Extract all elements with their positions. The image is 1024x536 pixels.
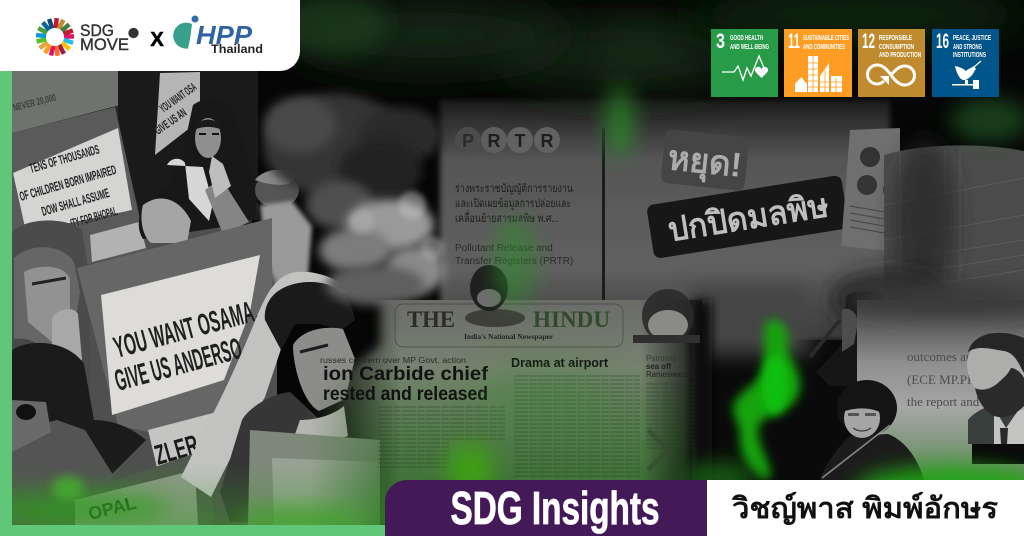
logo panel bbox=[0, 0, 300, 71]
SDG icon: goal 11 bbox=[784, 29, 852, 97]
sign: stop bbox=[660, 129, 750, 191]
iHPP Thailand logo: HPP bbox=[196, 20, 253, 50]
PRTR description text: Transfer Registers (PRTR) bbox=[455, 256, 573, 267]
panel: dark right-lower room bbox=[690, 282, 1024, 480]
SDG icon: goal 3 bbox=[711, 29, 778, 97]
sign: tens of thousands: TENS OF THOUSANDS bbox=[28, 142, 101, 176]
PRTR heading: T bbox=[514, 131, 526, 151]
banner: author name bbox=[707, 480, 1024, 536]
iHPP Thailand logo: Thailand bbox=[211, 42, 263, 56]
SDG icon: goal 12: CONSUMPTION bbox=[879, 42, 914, 51]
sign: conceal pollution bbox=[646, 175, 849, 259]
sign: tens of thousands: OF CHILDREN BORN IMPAIRED bbox=[18, 162, 118, 204]
sign: bottom left Bhopal: OPAL bbox=[86, 493, 138, 524]
sign: bottom left Bhopal bbox=[69, 454, 212, 525]
PRTR description text: ร่างพระราชบัญญัติการรายงาน bbox=[455, 182, 573, 195]
SDG icon: goal 3: AND WELL-BEING bbox=[730, 42, 769, 51]
headline: Union Carbide: russes concern over MP Govt. action bbox=[320, 355, 466, 365]
PRTR heading: P bbox=[462, 131, 474, 151]
panel: right dark building bbox=[830, 140, 1024, 330]
PRTR heading: R bbox=[488, 131, 500, 151]
PRTR description text: และเปิดเผยข้อมูลการปล่อยและ bbox=[455, 197, 571, 210]
arrow watermark bbox=[648, 430, 668, 470]
sign: you want osama give us anderson: GIVE US ANDERSO bbox=[111, 332, 245, 398]
photo: woman behind left bbox=[12, 220, 88, 360]
SDG icon: goal 16 bbox=[932, 29, 999, 97]
SDG icon: goal 16: INSTITUTIONS bbox=[953, 50, 986, 59]
PRTR description text: Pollutant Release and bbox=[455, 243, 553, 254]
photo: seated woman bbox=[139, 99, 256, 243]
photo: smiling woman with scarf bbox=[181, 272, 355, 522]
SDG Move wordmark bbox=[80, 21, 138, 54]
sign: stop: หยุด! bbox=[666, 139, 744, 187]
projected slide bbox=[845, 282, 1024, 480]
headline: Patroling bbox=[646, 355, 694, 377]
PRTR heading: R bbox=[540, 131, 554, 151]
masthead: The Hindu: HINDU bbox=[533, 307, 610, 332]
banner: SDG Insights bbox=[385, 480, 707, 536]
sign: you want osama small bbox=[152, 72, 200, 155]
SDG icon: goal 16: 16 bbox=[936, 30, 949, 53]
headline: Drama at airport: Drama at airport bbox=[511, 356, 609, 370]
SDG icon: goal 16: PEACE, JUSTICE bbox=[953, 33, 991, 42]
photo: bearded man bbox=[967, 333, 1024, 464]
photo: man in profile bbox=[816, 292, 865, 386]
sign: tens of thousands bbox=[12, 107, 147, 275]
headline: Patroling: Rameswaram bbox=[646, 370, 694, 379]
dark void and smoke clouds bbox=[263, 93, 445, 305]
SDG icon: goal 12: AND PRODUCTION bbox=[879, 50, 921, 59]
SDG icon: goal 16: AND STRONG bbox=[953, 42, 982, 51]
panel: newspaper clipping bbox=[310, 300, 712, 525]
PRTR description text bbox=[455, 182, 573, 267]
SDG Move wordmark: SDG bbox=[80, 21, 114, 40]
newspaper column text bbox=[378, 376, 695, 476]
sign fragment: Zeller: ZLER bbox=[151, 429, 202, 471]
headline: Patroling: Patroling in bbox=[646, 354, 685, 363]
headline: Union Carbide: rested and released bbox=[323, 384, 488, 405]
sign fragment: Zeller bbox=[148, 412, 214, 466]
headline: Union Carbide: ion Carbide chief bbox=[323, 364, 489, 385]
projected slide: (ECE MP.PR bbox=[907, 372, 976, 387]
banner: SDG Insights: SDG Insights bbox=[450, 482, 660, 534]
leaflet graphic bbox=[841, 128, 901, 252]
SDG icon: goal 11: 11 bbox=[788, 30, 800, 53]
sign: you want osama small: YOU WANT OSA bbox=[157, 80, 199, 115]
sign: tens of thousands: ITY FOR BHOPAL bbox=[69, 203, 119, 231]
SDG Move wordmark: MOVE bbox=[80, 35, 129, 54]
SDG icon: goal 12 bbox=[858, 29, 925, 97]
SDG icon: goal 3: GOOD HEALTH bbox=[730, 33, 763, 42]
sign: bottom centre board bbox=[248, 430, 380, 525]
sign: tens of thousands: DOW SHALL ASSUME bbox=[40, 185, 111, 219]
banner: author name: วิชญ์พาส พิมพ์อักษร bbox=[731, 491, 998, 526]
photo: woman at table bbox=[820, 380, 924, 480]
headline: Patroling: sea off bbox=[646, 362, 672, 371]
SDG icon: goal 11: SUSTAINABLE CITIES bbox=[803, 33, 849, 42]
masthead: The Hindu: India's National Newspaper bbox=[464, 332, 554, 341]
photo: man behind sign bbox=[255, 170, 312, 288]
sign: you want osama give us anderson bbox=[77, 218, 272, 445]
masthead: The Hindu: THE bbox=[407, 307, 455, 332]
PRTR description text: เคลื่อนย้ายสารมลพิษ พ.ศ... bbox=[455, 210, 559, 225]
SDG icon: goal 12: 12 bbox=[862, 30, 875, 53]
SDG icon: goal 11: AND COMMUNITIES bbox=[803, 42, 845, 51]
photo: man foreground left bbox=[12, 342, 146, 474]
SDG icon: goal 12: RESPONSIBLE bbox=[879, 33, 912, 42]
panel: Bhopal protest photo: NEVER 20,000 bbox=[12, 93, 58, 114]
sign: you want osama small: GIVE US AN bbox=[152, 105, 189, 137]
SDG icon: goal 3: 3 bbox=[716, 30, 725, 53]
panel: PRTR presentation screen bbox=[440, 100, 901, 348]
sign: you want osama give us anderson: YOU WANT OSAMA, bbox=[110, 295, 262, 365]
PRTR heading bbox=[455, 127, 560, 153]
headline: Union Carbide bbox=[320, 357, 488, 400]
panel: Bhopal protest photo bbox=[12, 70, 380, 525]
masthead: The Hindu bbox=[395, 304, 623, 347]
projected slide: the report and bbox=[907, 394, 980, 409]
icon: SDG colour wheel bbox=[36, 18, 74, 56]
sign: conceal pollution: ปกปิดมลพิษ bbox=[665, 186, 831, 248]
cross mark: X bbox=[150, 29, 164, 51]
photo: presenters with masks bbox=[470, 265, 700, 343]
projected slide: outcomes an bbox=[907, 349, 973, 364]
iHPP Thailand logo bbox=[173, 16, 263, 56]
